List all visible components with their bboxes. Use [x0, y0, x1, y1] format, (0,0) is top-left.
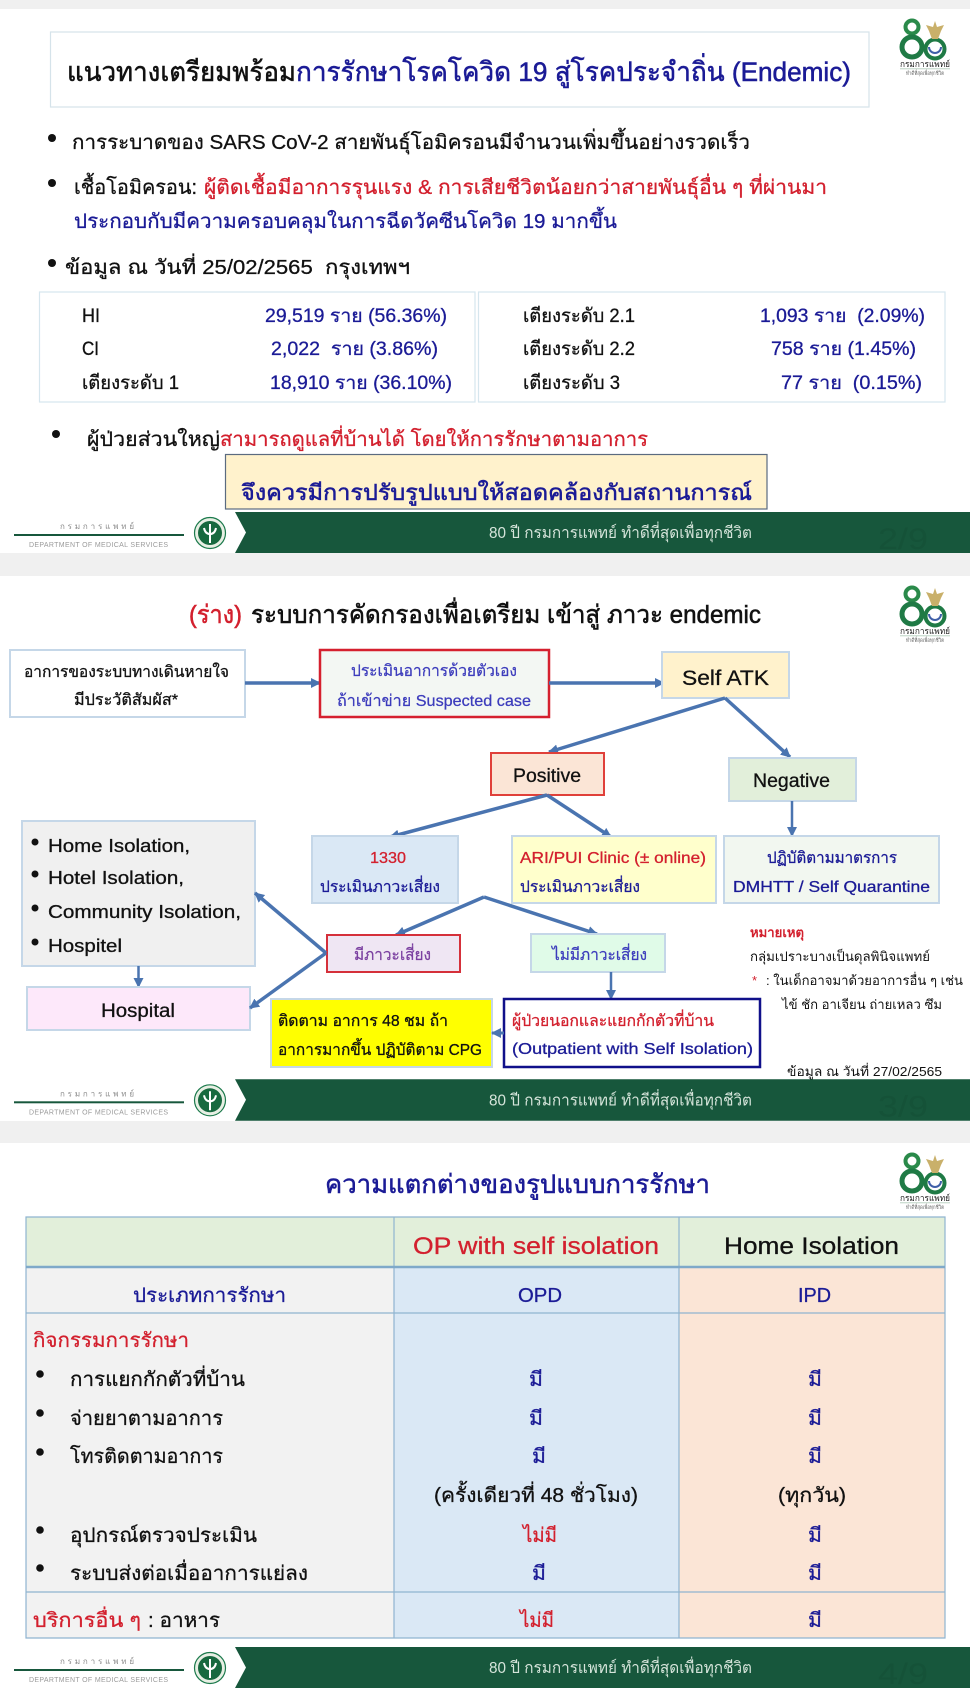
box: no risk: ไม่มีภาวะเสี่ยง: [550, 943, 647, 964]
box: negative: Negative: [753, 771, 830, 792]
row: other services food: [33, 1606, 822, 1632]
data table left: CI: [82, 339, 99, 360]
row: medicine: จ่ายยาตามอาการ: [70, 1408, 223, 1430]
box: follow-up 48 hours: อาการมากขึ้น ปฏิบัติตาม CPG: [278, 1038, 482, 1059]
bullet: data date: ข้อมูล ณ วันที่ 25/02/2565 กรุงเทพฯ: [65, 253, 410, 280]
section label: treatment activities: กิจกรรมการรักษา: [33, 1330, 189, 1352]
row: treatment type: [133, 1285, 831, 1307]
bullet: most patients at home: สามารถดูแลที่บ้านได้ โดยให้การรักษาตามอาการ: [220, 425, 648, 452]
arrow: clinic to no risk: [484, 897, 597, 934]
data table right: เตียงระดับ 2.2: [523, 338, 635, 360]
box: follow-up 48 hours: ติดตาม อาการ 48 ชม ถ้า: [278, 1012, 448, 1030]
arrow: ATK to negative: [725, 698, 790, 757]
box: self assessment: [320, 650, 549, 717]
logo: 80 years department: กรมการแพทย์: [900, 1193, 950, 1203]
row: home isolation: มี: [529, 1369, 543, 1391]
slide 2: screening system flowchart: [0, 576, 970, 1123]
slide 2 title: ระบบการคัดกรองเพื่อเตรียม เข้าสู่ ภาวะ endemic: [251, 597, 761, 630]
comparison table: [26, 1217, 945, 1638]
row: medicine: มี: [808, 1408, 822, 1430]
box: 1330: [312, 836, 458, 903]
box: respiratory symptoms: มีประวัติสัมผัส*: [74, 691, 178, 709]
box: respiratory symptoms: อาการของระบบทางเดินหายใจ: [24, 662, 229, 681]
logo: 80 years department: กรมการแพทย์: [900, 626, 950, 636]
box: respiratory symptoms: [10, 650, 245, 717]
row: home isolation: การแยกกักตัวที่บ้าน: [70, 1365, 245, 1391]
notes: หมายเหตุ: [750, 925, 804, 941]
logo: 80 years department: [900, 1154, 950, 1211]
box: Self ATK: Self ATK: [682, 667, 769, 690]
row: other services food: : อาหาร: [148, 1610, 220, 1632]
arrow: positive to clinic: [547, 795, 611, 837]
row: phone follow-up: โทรติดตามอาการ: [70, 1445, 223, 1468]
box: 1330: ประเมินภาวะเสี่ยง: [320, 875, 440, 896]
slide 3 title: ความแตกต่างของรูปแบบการรักษา: [325, 1169, 710, 1200]
arrow: isolation to hospital: [137, 966, 140, 987]
bullet: omicron severity: [48, 173, 827, 234]
arrow: self assessment to ATK: [549, 681, 664, 685]
row: referral system: [36, 1559, 822, 1585]
data table right: 1,093 ราย (2.09%): [760, 306, 925, 327]
row: referral system: มี: [532, 1563, 546, 1585]
footer slide 2: [14, 1079, 970, 1123]
box: outpatient with self isolation: (Outpatient with Self Isolation): [512, 1041, 753, 1058]
box: isolation options: [22, 821, 255, 966]
box: DMHTT: DMHTT / Self Quarantine: [733, 879, 930, 896]
row: other services food: ไม่มี: [518, 1609, 554, 1632]
box: has risk: มีภาวะเสี่ยง: [354, 943, 431, 964]
footer slide 2: 80 ปี กรมการแพทย์ ทำดีที่สุดเพื่อทุกชีวิต: [489, 1088, 752, 1110]
data table right: [478, 292, 945, 402]
row: other services food: มี: [808, 1610, 822, 1632]
table backgrounds: [26, 1217, 945, 1638]
data table left: 29,519 ราย (56.36%): [265, 306, 447, 327]
bullet: omicron spreading: การระบาดของ SARS CoV-2 สายพันธุ์โอมิครอนมีจำนวนเพิ่มขึ้นอย่างรวดเร็ว: [72, 128, 750, 155]
row: other services food: บริการอื่น ๆ: [33, 1606, 141, 1632]
notes: [750, 925, 963, 1012]
footer slide 1: 80 ปี กรมการแพทย์ ทำดีที่สุดเพื่อทุกชีวิต: [489, 521, 752, 543]
data table left: [40, 292, 475, 402]
footer slide 2: 3/9: [878, 1090, 928, 1123]
bullet: omicron severity: เชื้อโอมิครอน:: [74, 173, 197, 199]
callout: adapt to situation: จึงควรมีการปรับรูปแบบให้สอดคล้องกับสถานการณ์: [241, 480, 752, 506]
row: home isolation: [36, 1365, 822, 1391]
data table left: 18,910 ราย (36.10%): [270, 373, 452, 394]
data table right: 758 ราย (1.45%): [771, 339, 916, 360]
data table left: HI: [82, 306, 100, 327]
box: negative: [729, 758, 856, 801]
bullet: omicron severity: ผู้ติดเชื้อมีอาการรุนแรง & การเสียชีวิตน้อยกว่าสายพันธุ์อื่น ๆ ที่ผ่านมา: [204, 173, 827, 200]
row: assessment equipment: ไม่มี: [521, 1524, 557, 1547]
box: hospital: [27, 987, 250, 1030]
arrow: risk to isolation: [255, 893, 326, 953]
table header row: [413, 1233, 899, 1260]
row: medicine: มี: [529, 1408, 543, 1430]
data table right: 77 ราย (0.15%): [781, 373, 922, 394]
box: DMHTT: ปฏิบัติตามมาตรการ: [767, 850, 897, 867]
box: isolation options: Hotel Isolation,: [48, 868, 184, 888]
footer slide 1: กรมการแพทย์: [60, 521, 134, 531]
footer slide 1: 2/9: [878, 523, 928, 556]
row: assessment equipment: อุปกรณ์ตรวจประเมิน: [70, 1524, 257, 1548]
row: treatment type: IPD: [798, 1285, 831, 1307]
data table right: เตียงระดับ 3: [523, 372, 620, 394]
footer slide 3: 80 ปี กรมการแพทย์ ทำดีที่สุดเพื่อทุกชีวิต: [489, 1656, 752, 1678]
box: ARI clinic: ARI/PUI Clinic (± online): [520, 850, 706, 867]
bullet: omicron severity: ประกอบกับมีความครอบคลุมในการฉีดวัคซีนโควิด 19 มากขึ้น: [74, 207, 617, 234]
notes: : ในเด็กอาจมาด้วยอาการอื่น ๆ เช่น: [766, 971, 963, 988]
row: phone follow-up: [36, 1445, 846, 1508]
footer slide 1: [14, 512, 970, 556]
footer slide 3: กรมการแพทย์: [60, 1656, 134, 1666]
slide 2 title: (ร่าง): [189, 601, 242, 629]
bullet: most patients at home: [52, 425, 648, 452]
bullet: most patients at home: ผู้ป่วยส่วนใหญ่: [87, 428, 220, 452]
arrow: outpatient to follow-up: [492, 1032, 504, 1034]
arrow: positive to 1330: [390, 795, 547, 837]
data table right: เตียงระดับ 2.1: [523, 305, 635, 327]
box: follow-up 48 hours: [271, 999, 492, 1067]
arrow: symptoms to self assessment: [245, 681, 320, 685]
footer slide 1: DEPARTMENT OF MEDICAL SERVICES: [29, 542, 168, 549]
box: ARI clinic: [512, 836, 716, 903]
arrow: negative to quarantine: [791, 801, 793, 836]
logo: 80 years department: กรมการแพทย์: [900, 59, 950, 69]
logo: 80 years department: [900, 588, 950, 644]
callout: adapt to situation: [226, 454, 767, 509]
box: ARI clinic: ประเมินภาวะเสี่ยง: [520, 875, 640, 896]
data date note: ข้อมูล ณ วันที่ 27/02/2565: [787, 1063, 942, 1080]
row: treatment type: ประเภทการรักษา: [133, 1285, 286, 1307]
box: self assessment: ประเมินอาการด้วยตัวเอง: [351, 662, 517, 680]
box: positive: [491, 753, 604, 795]
slide 1 title box: แนวทางเตรียมพร้อม: [67, 57, 296, 87]
row: phone follow-up: มี: [532, 1446, 546, 1468]
logo: 80 years department: ทำดีที่สุดเพื่อทุกชีวิต: [906, 636, 944, 644]
box: positive: Positive: [513, 766, 581, 787]
row: medicine: [36, 1408, 822, 1430]
logo: 80 years department: ทำดีที่สุดเพื่อทุกชีวิต: [906, 69, 944, 77]
footer slide 2: กรมการแพทย์: [60, 1088, 134, 1098]
notes: ไข้ ชัก อาเจียน ถ่ายเหลว ซึม: [781, 997, 942, 1012]
row: home isolation: มี: [808, 1369, 822, 1391]
table header row: Home Isolation: [724, 1233, 899, 1260]
slide 1: preparing treatment for endemic: [0, 9, 970, 556]
row: phone follow-up: (ทุกวัน): [778, 1485, 846, 1508]
notes: กลุ่มเปราะบางเป็นดุลพินิจแพทย์: [750, 947, 930, 965]
box: outpatient with self isolation: ผู้ป่วยนอกและแยกกักตัวที่บ้าน: [512, 1009, 714, 1031]
arrow: clinic to risk: [396, 897, 484, 935]
footer slide 2: DEPARTMENT OF MEDICAL SERVICES: [29, 1109, 168, 1116]
row: phone follow-up: (ครั้งเดียวที่ 48 ชั่วโมง): [434, 1481, 638, 1507]
box: self assessment: ถ้าเข้าข่าย Suspected case: [337, 692, 531, 710]
footer slide 3: DEPARTMENT OF MEDICAL SERVICES: [29, 1677, 168, 1684]
box: hospital: Hospital: [101, 1001, 175, 1022]
arrow: no risk to outpatient: [610, 972, 612, 999]
slide 1 title box: การรักษาโรคโควิด 19 สู่โรคประจำถิ่น (Endemic): [296, 53, 851, 88]
arrow: risk to hospital: [250, 953, 326, 1008]
data table left: เตียงระดับ 1: [82, 372, 179, 394]
row: referral system: มี: [808, 1563, 822, 1585]
arrow: ATK to positive: [549, 698, 725, 752]
box: has risk: [327, 935, 460, 972]
logo: 80 years department: ทำดีที่สุดเพื่อทุกชีวิต: [906, 1203, 944, 1211]
slide 3: differences in treatment models: [0, 1143, 970, 1688]
box: isolation options: Home Isolation,: [48, 836, 190, 856]
box: 1330: 1330: [370, 850, 406, 867]
row: assessment equipment: มี: [808, 1525, 822, 1547]
table header row: OP with self isolation: [413, 1233, 659, 1260]
box: outpatient with self isolation: [504, 999, 760, 1067]
logo: 80 years department: [900, 20, 950, 77]
row: referral system: ระบบส่งต่อเมื่ออาการแย่ลง: [70, 1559, 308, 1585]
row: treatment type: OPD: [518, 1285, 562, 1307]
box: isolation options: Hospitel: [48, 936, 122, 956]
box: DMHTT: [724, 836, 939, 903]
row: assessment equipment: [36, 1524, 822, 1548]
footer slide 3: [14, 1647, 970, 1688]
slide 1 title box: [50, 32, 869, 107]
box: isolation options: Community Isolation,: [48, 902, 241, 922]
notes: *: [752, 973, 757, 988]
data table left: 2,022 ราย (3.86%): [271, 339, 438, 360]
row: phone follow-up: มี: [808, 1446, 822, 1468]
box: no risk: [531, 934, 665, 972]
box: Self ATK: [662, 652, 789, 698]
